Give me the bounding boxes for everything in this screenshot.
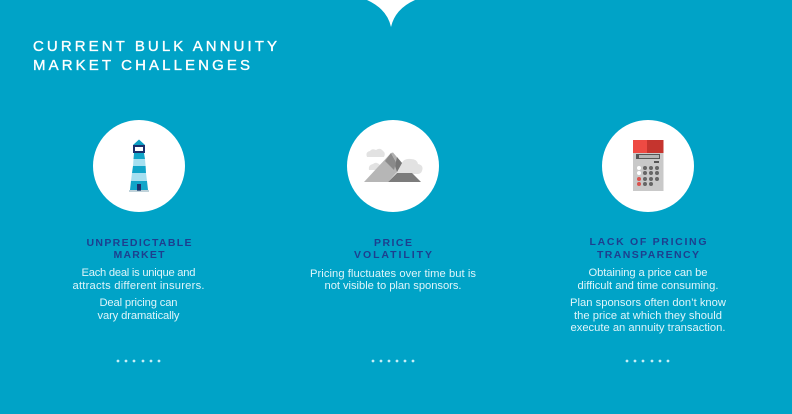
text: unpredictable market description: Each deal is unique and (82, 267, 196, 279)
dots (117, 360, 160, 362)
dots (372, 360, 414, 362)
heading: unpredictable market (86, 237, 192, 261)
text: price volatility description: Pricing fluctuates over time but is (310, 268, 476, 280)
title: CURRENT BULK ANNUITY (33, 38, 277, 55)
heading: lack of pricing transparency (590, 236, 706, 261)
text: pricing transparency description: Obtaining a price can be (588, 267, 708, 279)
text: unpredictable market description (72, 267, 204, 322)
panel: price volatility (310, 120, 476, 362)
icon: calculator (602, 120, 694, 212)
panel: lack of pricing transparency (570, 120, 727, 362)
text: unpredictable market description: attracts different insurers. (72, 280, 204, 292)
heading: price volatility: PRICE (374, 237, 412, 249)
dots (626, 360, 669, 362)
top notch (367, 0, 415, 27)
title: MARKET CHALLENGES (33, 57, 250, 74)
heading: unpredictable market: UNPREDICTABLE (86, 237, 192, 249)
icon: mountains and clouds (347, 120, 439, 212)
title (33, 38, 277, 74)
text: unpredictable market description: vary dramatically (98, 310, 180, 322)
text: price volatility description: not visible to plan sponsors. (324, 280, 462, 292)
text: price volatility description (310, 268, 476, 292)
panel: unpredictable market (72, 120, 204, 362)
heading: lack of pricing transparency: LACK OF PRICING (590, 236, 706, 248)
heading: lack of pricing transparency: TRANSPARENCY (597, 249, 699, 261)
text: pricing transparency description: the price at which they should (574, 310, 722, 322)
text: pricing transparency description: Plan sponsors often don’t know (570, 297, 727, 309)
text: pricing transparency description (570, 267, 727, 334)
heading: unpredictable market: MARKET (114, 249, 165, 261)
text: pricing transparency description: execute an annuity transaction. (570, 322, 726, 334)
heading: price volatility: VOLATILITY (354, 249, 432, 261)
heading: price volatility (354, 237, 432, 261)
text: unpredictable market description: Deal pricing can (100, 297, 178, 309)
icon: lighthouse (93, 120, 185, 212)
text: pricing transparency description: difficult and time consuming. (578, 280, 718, 292)
